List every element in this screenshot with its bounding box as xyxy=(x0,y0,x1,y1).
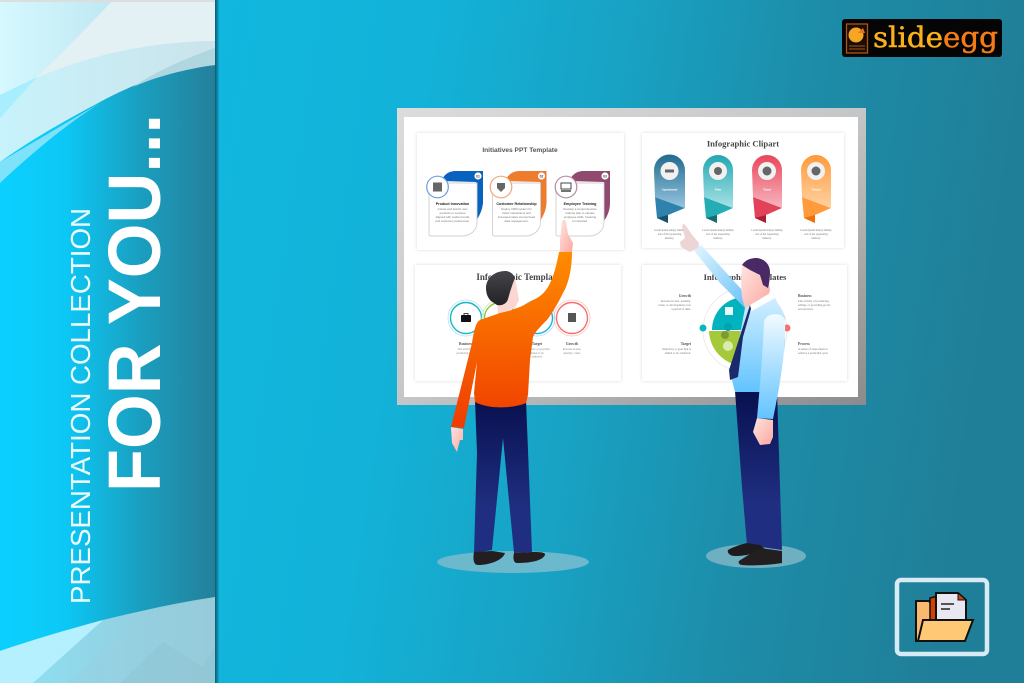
panel: initiatives template xyxy=(417,133,624,250)
card: customer relationship: better interactions and xyxy=(502,211,531,215)
hand up xyxy=(560,220,573,252)
panel: infographic templates pie: aimed to be achieved. xyxy=(665,351,691,355)
lower hand xyxy=(753,418,773,445)
panel: infographic templates pie: Increase in size, quantity, xyxy=(661,299,691,304)
panel: infographic templates pie: Process xyxy=(798,342,810,346)
card: customer relationship: Customer Relationship xyxy=(496,202,537,206)
panel: infographic templates pie xyxy=(642,265,847,381)
collar xyxy=(750,292,775,312)
circle: growth: quantity, value. xyxy=(563,351,581,355)
panel: infographic templates pie: Growth xyxy=(679,294,691,298)
pin: plan xyxy=(702,155,734,240)
circle: growth xyxy=(554,300,590,355)
circle: target: Objective or goal that xyxy=(524,347,550,351)
circle: business: producing goods xyxy=(456,351,477,355)
panel: infographic templates pie: A series of steps taken to xyxy=(798,347,828,351)
panel: infographic templates pie: selling, or providing goods xyxy=(798,303,831,308)
panel: infographic templates pie: and services. xyxy=(798,307,814,311)
card: customer relationship: 02 xyxy=(540,174,543,178)
pin: agreement xyxy=(654,154,686,240)
card: customer relationship xyxy=(490,171,546,236)
card: product innovation xyxy=(427,171,483,236)
card: employee training: training plan to elevate xyxy=(565,211,595,215)
card: customer relationship: data management. xyxy=(504,219,529,223)
neck xyxy=(497,278,519,314)
text: presentation collection: PRESENTATION COLLECTION xyxy=(65,208,96,604)
card: employee training: a motivated. xyxy=(572,219,588,223)
panel: infographic clipart: Infographic Clipart xyxy=(707,138,779,148)
raised arm xyxy=(692,245,752,308)
hair xyxy=(486,271,515,305)
pin: team: text of the typesetting xyxy=(755,233,779,236)
shadow xyxy=(437,551,589,573)
panel: infographic templates pie: Target xyxy=(681,342,692,346)
circle: business: The activity of xyxy=(457,347,475,351)
card: employee training: employee skills, fostering xyxy=(564,215,597,219)
pin: plan: industry. xyxy=(713,237,723,240)
circle: target: aimed to be xyxy=(530,351,544,355)
shoes xyxy=(728,543,765,556)
pin: plan: Lorem Ipsum simply dummy xyxy=(702,229,734,232)
circle: growth: Growth xyxy=(566,342,579,346)
circle: target xyxy=(519,300,555,358)
trousers xyxy=(735,391,782,550)
circle: growth: Increase in size, xyxy=(563,347,582,351)
pin: target: industry. xyxy=(811,237,821,240)
panel: infographic clipart xyxy=(642,133,844,248)
card: employee training: 03 xyxy=(603,174,607,178)
pin: agreement: Lorem Ipsum simply dummy xyxy=(654,229,686,232)
logo: slideegg xyxy=(842,19,1002,57)
raised hand xyxy=(680,224,699,252)
card: product innovation: Create and launch new xyxy=(438,207,468,211)
pin: target: Target xyxy=(811,188,822,192)
logo: slideegg: slideegg xyxy=(873,21,998,54)
panel: infographic templates pie: Infographic Templates xyxy=(704,272,787,282)
pin: plan: text of the typesetting xyxy=(706,233,730,236)
pie segment: growth xyxy=(712,297,745,330)
pin: team: industry. xyxy=(762,237,772,240)
pin: team: Team xyxy=(763,188,771,192)
card: product innovation: and customer preferences. xyxy=(435,219,470,223)
card: employee training: Employee Training xyxy=(564,202,596,206)
card: product innovation: products or services xyxy=(440,211,466,215)
pin: agreement: industry. xyxy=(665,237,674,240)
pin: team xyxy=(751,155,783,240)
pin: target xyxy=(800,155,832,240)
panel: infographic templates pie: a period of time. xyxy=(671,307,691,311)
pin: target: Lorem Ipsum simply dummy xyxy=(800,229,832,232)
card: product innovation: aligned with market trends xyxy=(436,215,470,219)
shirt xyxy=(732,292,785,392)
head xyxy=(741,266,770,308)
sleeve xyxy=(757,314,785,419)
pie segment: target xyxy=(709,331,745,366)
card: product innovation: Product Innovation xyxy=(436,202,470,206)
circle: process xyxy=(482,300,518,336)
pin: team: Lorem Ipsum simply dummy xyxy=(751,229,783,232)
circle: business xyxy=(448,300,484,355)
icon: folder with document xyxy=(897,580,987,654)
card: employee training xyxy=(555,171,610,236)
pin: agreement: text of the typesetting xyxy=(658,233,682,236)
circle: business: Business xyxy=(459,342,473,346)
hand down xyxy=(451,427,463,452)
pin: plan: Plan xyxy=(715,188,721,192)
shoes xyxy=(473,551,505,565)
sweater xyxy=(451,252,572,428)
panel: infographic templates pie: Business xyxy=(798,294,812,298)
panel: display board xyxy=(397,108,866,405)
pin: target: text of the typesetting xyxy=(804,233,828,236)
panel: initiatives template: Initiatives PPT Template xyxy=(482,147,558,154)
panel: infographic template circles xyxy=(415,265,621,381)
trousers xyxy=(474,400,532,553)
card: product innovation: 01 xyxy=(476,174,480,178)
panel: infographic template circles: Infographic Template xyxy=(476,272,560,282)
tie xyxy=(729,305,751,380)
figure: man in orange sweater xyxy=(437,220,589,573)
circle: target: achieved. xyxy=(532,354,543,358)
shadow xyxy=(706,544,806,568)
figure: man in blue shirt xyxy=(680,224,806,568)
circle: target: Target xyxy=(532,342,543,346)
hair xyxy=(742,258,770,288)
card: customer relationship: increased sales via improved xyxy=(498,215,536,219)
panel: left sidebar xyxy=(0,0,219,683)
card: customer relationship: Deploy CRM system for xyxy=(501,207,532,211)
panel: infographic templates pie: value, or development over xyxy=(658,303,691,308)
card: employee training: Develop a comprehensive xyxy=(563,207,597,211)
panel: infographic templates pie: Objective or goal that is xyxy=(662,347,692,351)
text: for you: FOR YOU... xyxy=(93,114,176,492)
pin: agreement: Agreement xyxy=(662,188,678,192)
panel: infographic templates pie: The activity of producing, xyxy=(798,299,830,304)
panel: infographic templates pie: achieve a particular goal. xyxy=(798,351,828,355)
